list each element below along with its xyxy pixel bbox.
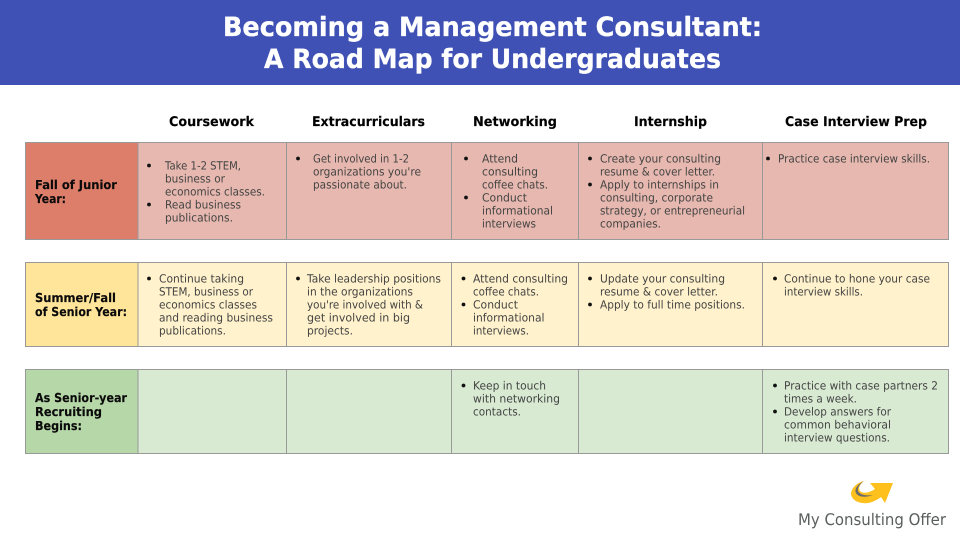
- row label: as senior-year recruiting begins: As Senior-year: [35, 391, 128, 405]
- coursework cell: STEM, business or: [159, 286, 253, 298]
- icon: curved yellow arrow: [851, 481, 893, 503]
- row label: fall of junior year: [34, 178, 118, 206]
- coursework cell: Continue taking: [159, 272, 244, 286]
- case interview prep cell: Practice with case partners 2: [784, 380, 938, 392]
- column headings: Networking: [473, 115, 557, 130]
- internship cell: Update your consulting: [600, 272, 725, 286]
- networking cell: consulting: [482, 166, 538, 178]
- extracurriculars cell: passionate about.: [313, 178, 407, 192]
- internship cell: [588, 152, 745, 230]
- coursework cell: [147, 272, 273, 338]
- coursework cell: and reading business: [159, 312, 273, 324]
- extracurriculars cell: [296, 272, 441, 338]
- extracurriculars cell: Get involved in 1-2: [313, 152, 409, 166]
- logo: my consulting offer: [798, 481, 946, 529]
- internship cell: resume & cover letter.: [600, 286, 718, 298]
- case interview prep cell: interview questions.: [784, 432, 890, 444]
- panel: fall of junior year row: [26, 142, 948, 240]
- title banner: A Road Map for Undergraduates: [264, 44, 721, 75]
- case interview prep cell: [773, 272, 930, 298]
- coursework cell: business or: [165, 172, 225, 186]
- panel: summer/fall of senior year row: [26, 262, 948, 346]
- row label: fall of junior year: Fall of Junior: [35, 178, 118, 192]
- case interview prep cell: [773, 380, 938, 444]
- internship cell: strategy, or entrepreneurial: [600, 204, 745, 218]
- row label: summer/fall of senior year: Summer/Fall: [35, 291, 116, 305]
- extracurriculars cell: get involved in big: [307, 312, 410, 324]
- extracurriculars cell: Take leadership positions: [306, 272, 441, 286]
- case interview prep cell: Continue to hone your case: [784, 272, 930, 286]
- row label: summer/fall of senior year: of Senior Year:: [35, 305, 127, 319]
- extracurriculars cell: in the organizations: [307, 286, 413, 298]
- networking cell: coffee chats.: [473, 286, 539, 298]
- networking cell: interviews.: [473, 324, 529, 338]
- column headings: Coursework: [169, 115, 255, 130]
- coursework cell: Take 1-2 STEM,: [164, 160, 241, 172]
- panel: as senior-year recruiting begins row: [26, 370, 948, 454]
- networking cell: interviews: [482, 218, 536, 230]
- coursework cell: economics classes: [159, 298, 257, 312]
- case interview prep cell: interview skills.: [784, 286, 863, 298]
- networking cell: informational: [473, 312, 544, 324]
- networking cell: with networking: [473, 392, 560, 406]
- column headings: Extracurriculars: [312, 115, 425, 130]
- internship cell: Apply to full time positions.: [600, 298, 745, 312]
- extracurriculars cell: you're involved with &: [307, 298, 423, 312]
- networking cell: contacts.: [473, 406, 521, 418]
- column headings: [169, 115, 927, 130]
- case interview prep cell: times a week.: [784, 392, 857, 406]
- extracurriculars cell: projects.: [307, 324, 353, 338]
- internship cell: Apply to internships in: [600, 178, 719, 192]
- logo: my consulting offer: My Consulting Offer: [798, 510, 946, 529]
- coursework cell: economics classes.: [165, 186, 265, 198]
- title banner: [0, 0, 960, 85]
- networking cell: coffee chats.: [482, 178, 548, 192]
- coursework cell: [147, 160, 265, 224]
- row label: fall of junior year: Year:: [34, 192, 66, 206]
- coursework cell: publications.: [165, 212, 233, 224]
- row label: as senior-year recruiting begins: [35, 391, 128, 433]
- networking cell: Attend: [482, 152, 518, 166]
- case interview prep cell: common behavioral: [784, 418, 891, 432]
- internship cell: resume & cover letter.: [600, 166, 715, 178]
- column headings: Case Interview Prep: [785, 115, 927, 130]
- extracurriculars cell: [296, 152, 421, 192]
- case interview prep cell: Develop answers for: [784, 406, 891, 418]
- title banner: Becoming a Management Consultant:: [223, 12, 762, 43]
- column headings: Internship: [634, 115, 707, 130]
- networking cell: [462, 380, 560, 418]
- internship cell: companies.: [600, 218, 661, 230]
- case interview prep cell: Practice case interview skills.: [778, 152, 930, 166]
- row label: summer/fall of senior year: [35, 291, 127, 319]
- internship cell: [588, 272, 745, 312]
- networking cell: [464, 152, 553, 230]
- internship cell: consulting, corporate: [600, 192, 713, 204]
- networking cell: Attend consulting: [473, 272, 568, 286]
- extracurriculars cell: organizations you're: [313, 166, 421, 178]
- networking cell: Keep in touch: [473, 380, 546, 392]
- networking cell: [462, 272, 568, 338]
- row label: as senior-year recruiting begins: Begins:: [35, 419, 82, 433]
- networking cell: Conduct: [482, 192, 528, 204]
- networking cell: informational: [482, 204, 553, 218]
- row label: as senior-year recruiting begins: Recruiting: [35, 405, 102, 419]
- coursework cell: publications.: [159, 324, 226, 338]
- coursework cell: Read business: [165, 198, 241, 212]
- networking cell: Conduct: [473, 298, 519, 312]
- internship cell: Create your consulting: [600, 152, 721, 166]
